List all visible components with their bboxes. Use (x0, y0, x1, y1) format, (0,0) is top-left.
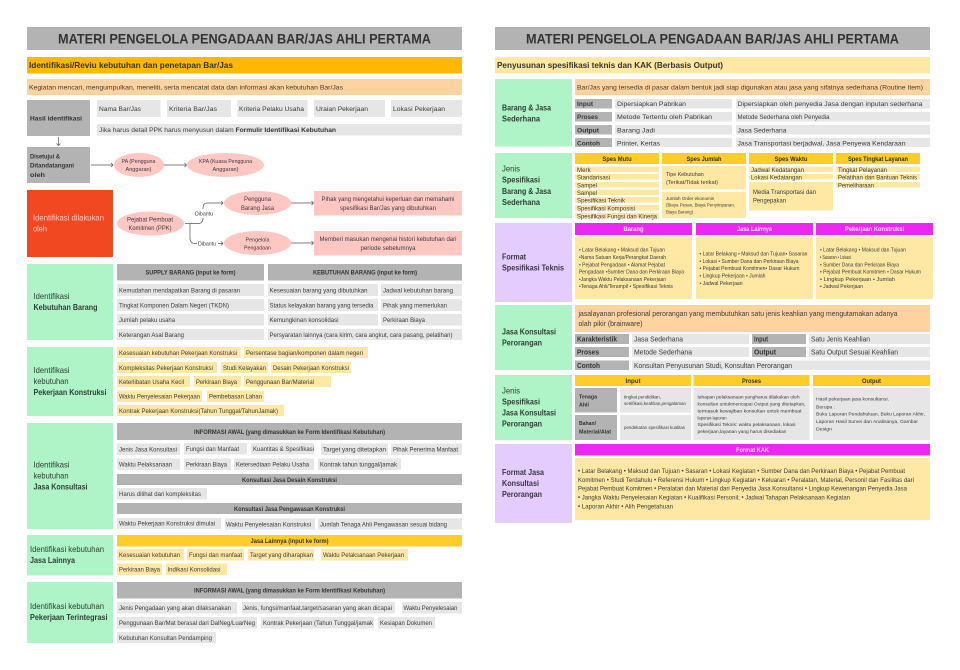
column: jasa lainnya: • Jadwal Pekerjaan (700, 281, 743, 287)
column: spes mutu: Sampel (577, 190, 597, 197)
column: input: Bahan/ (579, 421, 597, 427)
header: informasi awal: INFORMASI AWAL (yang dimasukkan ke Form Identifikasi Kebutuhan) (194, 429, 385, 436)
column: spes jumlah: Tipe Kebutuhan (666, 172, 704, 178)
description: jasalayanan profesional perorangan yang membutuhkan satu jenis keahlian yang mengutamakan adanya (578, 310, 898, 318)
description (575, 79, 930, 95)
panel: barang dan jasa sederhana (495, 79, 930, 148)
panel: pekerjaan konstruksi: Identifikasi (34, 366, 70, 375)
panel: format jasa konsultasi perorangan (495, 444, 930, 523)
panel: jenis spesifikasi jasa konsultasi: Jenis (502, 387, 520, 396)
chips: Jenis, fungsi/manfaat,target/sasaran yang akan dicapai (243, 605, 392, 612)
ellipse: KPA: Anggaran) (212, 167, 239, 173)
chips: Jenis Pengadaan yang akan dilaksanakan (119, 605, 231, 612)
column: input: Tenaga (579, 394, 597, 400)
column: output: Output (862, 378, 882, 385)
chip: pelaku: Kriteria Pelaku Usaha (239, 106, 304, 113)
column: spes mutu (575, 153, 659, 220)
chip: pelaku (238, 100, 308, 117)
title right: MATERI PENGELOLA PENGADAAN BAR/JAS AHLI PERTAMA (526, 32, 899, 48)
panel: jenis spesifikasi barang jasa (495, 153, 920, 220)
column: spes tingkat layanan (836, 153, 920, 189)
panel: jasa konsultasi: kebutuhan (34, 472, 68, 480)
column: spes tingkat layanan: Pemeliharaan (838, 182, 874, 189)
panel: disetujui: oleh (30, 172, 45, 179)
chips: Waktu Penyelesaian Konstruksi (226, 522, 311, 528)
panel: disetujui: Ditandatangani (30, 162, 74, 170)
ellipse: PA: PA (Pengguna (122, 159, 156, 165)
chips: Pihak yang memerlukan (383, 302, 447, 309)
panel: jasa konsultasi: Jasa Konsultasi (34, 483, 88, 492)
ellipse: PPK (117, 212, 184, 236)
arrow: down (56, 137, 60, 146)
chips: Jadwal kebutuhan barang (383, 287, 453, 294)
chip: kriteria: Kriteria Bar/Jas (169, 106, 218, 113)
chips: Studi Kelayakan (223, 365, 266, 372)
table: Satu Output Sesuai Keahlian (811, 348, 898, 356)
ellipse: PPK: Pejabat Pembuat (127, 216, 173, 223)
column: output: Hasil pekerjaan jasa konsultansi. (816, 397, 889, 402)
chips: Waktu Pelaksanaan (119, 462, 172, 468)
chips: Jenis Jasa Konsultasi (119, 447, 177, 454)
chips: Fungsi dan manfaat (189, 552, 242, 559)
table: Contoh (577, 140, 600, 148)
table (575, 334, 930, 370)
section heading: identifikasi (27, 57, 462, 74)
header: informasi awal (117, 582, 462, 598)
column: proses: termasuk kewajiban konsultan untuk membuat (698, 408, 802, 413)
panel: format spesifikasi teknis: Spesifikasi Teknis (502, 264, 564, 273)
panel: format jasa konsultasi perorangan: Konsultasi (502, 479, 539, 488)
column: spes waktu: Pengepakan (753, 198, 786, 205)
panel: pekerjaan konstruksi (27, 347, 368, 416)
table: Input (754, 336, 769, 344)
panel: identifikasi dilakukan oleh: oleh (33, 224, 47, 234)
chips: Perkiraan Biaya (383, 317, 425, 324)
chips: Status kelayakan barang yang tersedia (270, 302, 374, 309)
chip: lokasi (391, 100, 462, 117)
chips: Perkiraan Biaya (196, 379, 237, 386)
chips: Keterlibatan Usaha Kecil (119, 379, 184, 386)
column: input: Material/Alat (579, 430, 611, 436)
ellipse: PPK: Komitmen (PPK) (128, 225, 172, 232)
header: informasi awal: INFORMASI AWAL (yang dimasukkan ke Form Identifikasi Kebutuhan) (194, 588, 385, 594)
column: proses: tahapan pelaksanaan yangharus dilakukan oleh (698, 394, 800, 400)
column: jasa lainnya: Jasa Lainnya (737, 226, 772, 233)
panel: kebutuhan barang: Kebutuhan Barang (34, 303, 98, 312)
column: jasa lainnya: • Lingkup Pekerjaan • Jumlah (700, 274, 766, 280)
table: Barang Jadi (617, 127, 656, 134)
chips (117, 443, 462, 470)
table: Proses (577, 114, 598, 121)
column: spes jumlah: (Biaya Pesan, Biaya Penyimpanan, (666, 203, 735, 208)
description text: Kegiatan mencari, mengumpulkan, meneliti, serta mencatat data dan informasi akan kebutuhan Bar/Jas (29, 84, 344, 92)
chips: Fungsi dan Manfaat (186, 446, 239, 453)
left column (27, 27, 462, 643)
column: spes jumlah: Spes Jumlah (686, 156, 722, 163)
section heading: identifikasi: Identifikasi/Reviu kebutuhan dan penetapan Bar/Jas (29, 61, 233, 70)
chips (117, 518, 462, 530)
connector: PPK branches: Dibantu (195, 211, 213, 217)
title right (495, 27, 930, 50)
column: spes tingkat layanan: Tingkat Pelayanan (838, 167, 887, 174)
panel: jenis spesifikasi barang jasa: Barang & Jasa (502, 187, 551, 196)
chips: Target yang ditetapkan (323, 447, 386, 454)
column: spes waktu: Lokasi Kedatangan (751, 174, 802, 181)
column: input: Input (626, 378, 641, 385)
callout: pengguna: Pihak yang mengetahui keperluan dan memahami (322, 196, 455, 203)
column: pekerjaan konstruksi: • Jadwal Pekerjaan (820, 284, 863, 290)
panel: identifikasi dilakukan oleh: Identifikasi dilakukan (33, 214, 104, 222)
column: input: pendekatan spesifikasi kualitas (624, 425, 685, 430)
panel: jenis spesifikasi barang jasa: Sederhana (502, 198, 541, 207)
column: pekerjaan konstruksi: • Latar Belakang • Maksud dan Tujuan (820, 248, 906, 254)
KAK content (575, 458, 930, 520)
panel: jenis spesifikasi jasa konsultasi (495, 375, 930, 440)
column: spes waktu: Media Transportasi dan (753, 189, 816, 196)
section heading: penyusunan: Penyusunan spesifikasi teknis dan KAK (Berbasis Output) (497, 61, 723, 70)
panel: format jasa konsultasi perorangan: Format Jasa (502, 468, 544, 477)
column: spes waktu: Spes Waktu (774, 156, 808, 163)
chip: uraian: Uraian Pekerjaan (316, 106, 368, 113)
chips: Kesesuaian barang yang dibutuhkan (270, 287, 368, 294)
table: Metode Sederhana oleh Penyedia (738, 114, 830, 121)
column: pekerjaan konstruksi (816, 223, 933, 299)
header: format KAK: Format KAK (736, 447, 769, 454)
table: Karakteristik (577, 336, 617, 344)
table: Proses (577, 348, 599, 356)
ellipse: pengguna: Pengguna (244, 196, 271, 203)
chips (117, 347, 368, 416)
column: pekerjaan konstruksi: • Sumber Dana dan Perkiraan Biaya (820, 262, 899, 268)
column: output: Buku Laporan Pendahuluan, Buku Laporan Akhir, (816, 412, 925, 416)
chips: Persentase bagian/komponen dalam negeri (246, 350, 363, 357)
table: Jasa Sederhana (634, 336, 683, 344)
chips: Kuantitas & Spesifikasi (253, 446, 314, 453)
column: spes waktu (749, 153, 833, 210)
ellipse: pengguna (224, 191, 291, 215)
column: barang: Barang (624, 226, 644, 233)
column: input: tingkat pendidikan, (624, 394, 661, 399)
column: spes tingkat layanan: Spes Tingkat Layanan (848, 156, 908, 163)
column: barang: • Pejabat Pengadaan • Alamat Pejabat (579, 262, 665, 268)
column: spes mutu: Spesifikasi Fungsi dan Kinerja (577, 213, 657, 220)
title left: MATERI PENGELOLA PENGADAAN BAR/JAS AHLI PERTAMA (58, 32, 431, 48)
column: pekerjaan konstruksi: Pekerjaan Konstruksi (845, 226, 904, 233)
connector: PPK branches (185, 201, 223, 247)
header: jasa lainnya: Jasa Lainnya (input ke form) (250, 538, 328, 545)
panel: kebutuhan barang: Identifikasi (34, 292, 70, 301)
chips (117, 602, 462, 643)
column: jasa lainnya (696, 223, 813, 299)
chips: Desain Pekerjaan Konstruksi (273, 365, 349, 372)
chips: Kebutuhan Konsultan Pendamping (119, 635, 212, 642)
column: barang: • Latar Belakang • Maksud dan Tujuan (579, 248, 665, 254)
chips (117, 549, 408, 575)
column: pekerjaan konstruksi: • Sasaran • Lokasi (820, 255, 851, 261)
ellipse: KPA (187, 153, 264, 177)
column: spes mutu: Merk (577, 167, 591, 174)
chips: Kontrak tahun tunggal/jamak (320, 462, 398, 468)
chip: uraian (314, 100, 385, 117)
table: Metode Sederhana (634, 348, 692, 356)
header: kebutuhan: KEBUTUHAN BARANG (input ke form) (313, 270, 417, 276)
panel: jasa konsultasi (27, 423, 462, 530)
chips: Kesesuaian kebutuhan (119, 552, 180, 559)
table: Printer, Kertas (617, 140, 661, 148)
ellipse: PA (114, 153, 164, 177)
chips: Pembebasan Lahan (209, 394, 262, 400)
chips: Pihak Penerima Manfaat (393, 447, 458, 454)
panel: jasa konsultasi perorangan (495, 305, 930, 370)
chips: Waktu Pelaksanaan Pekerjaan (323, 552, 404, 559)
table (575, 99, 930, 148)
KAK content: • Jangka Waktu Penyelesaian Kegiatan • Kualifikasi Personil; • Jadwal Tahapan Pelaksanaan Kegiatan (578, 496, 850, 502)
column: spes mutu: Spes Mutu (602, 156, 632, 163)
KAK content: • Latar Belakang • Maksud dan Tujuan • Sasaran • Lokasi Kegiatan • Sumber Dana dan Perkiraan Biaya • Pejabat Pembuat (578, 469, 905, 475)
header: supply (117, 264, 264, 280)
table: Jasa Sederhana (738, 127, 787, 134)
column: barang (575, 223, 692, 299)
column: barang: •Nama Satuan Kerja/Perangkat Daerah (579, 255, 666, 261)
connector: PPK branches: Dibantu (198, 241, 216, 247)
column: input: sertifikasi,keahlian,pengalaman (624, 401, 687, 406)
column: spes mutu: Sampel (577, 182, 597, 189)
chips: Indikasi Konsolidasi (168, 567, 221, 574)
column: jasa lainnya: • Latar Belakang • Maksud dan Tujuan• Sasaran (700, 252, 808, 258)
chips: Jumlah Tenaga Ahli Pengawasan sesuai bidang (320, 522, 447, 528)
chips: Ketersediaan Pelaku Usaha (236, 462, 309, 468)
column: pekerjaan konstruksi: • Lingkup Pekerjaan • Jumlah (820, 277, 895, 283)
ellipse: KPA: KPA (Kuasa Pengguna (199, 159, 252, 165)
panel: pekerjaan konstruksi: kebutuhan (34, 377, 68, 386)
column: spes waktu: Jadwal Kedatangan (751, 167, 804, 174)
KAK content: Komitmen • Studi Terdahulu • Referensi Hukum • Lingkup Kegiatan • Keluaran • Peralatan, Material, Personil dan Fasilitas dari (578, 478, 914, 484)
ellipse: pengguna: Barang Jasa (241, 205, 274, 212)
KAK content: • Laporan Akhir • Alih Pengetahuan (578, 504, 673, 510)
chip: kriteria (167, 100, 231, 117)
panel: format spesifikasi teknis (495, 223, 933, 302)
description (575, 305, 930, 332)
table: Contoh (577, 362, 600, 370)
panel: disetujui (27, 147, 90, 183)
column: barang: •Tenaga Ahli/Terampil • Spesifikasi Teknis (579, 284, 673, 290)
panel: pekerjaan terintegrasi: Pekerjaan Terintegrasi (30, 613, 108, 622)
header: supply: SUPPLY BARANG (input ke form) (146, 270, 236, 276)
panel: jasa konsultasi perorangan: Jasa Konsultasi (502, 328, 556, 337)
chips: Perkiraan Biaya (186, 462, 227, 468)
chips: Waktu Penyelesaian (404, 605, 458, 612)
description text (27, 79, 462, 95)
column: input: Ahli (579, 402, 590, 408)
callout: pengguna (314, 191, 462, 216)
chip: nama: Nama Bar/Jas (99, 106, 142, 113)
KAK content: Pejabat Pembuat Komitmen • Peralatan dan Material dari Penyedia Jasa Konsultansi • Lingkup Kewenangan Penyedia Jasa (578, 487, 908, 493)
chip: kompleksitas: Harus dilihat dari kompleksitas (119, 491, 202, 498)
description: olah pikir (brainware) (578, 320, 642, 328)
column: jasa lainnya: • Pejabat Pembuat Komitmen• Dasar Hukum (700, 266, 800, 272)
column: proses: laporan-laporan (698, 415, 727, 420)
chips: Kemudahan mendapatkan Barang di pasaran (119, 287, 240, 294)
chips: Kontrak Pekerjaan (Tahun Tunggal/jamak (263, 620, 374, 627)
table: Input (577, 101, 594, 108)
column: jasa lainnya: • Lokasi • Sumber Dana dan Perkiraan Biaya (700, 259, 798, 265)
panel: pekerjaan konstruksi: Pekerjaan Konstruksi (34, 388, 106, 397)
panel: jasa lainnya: Jasa Lainnya (30, 556, 75, 565)
section heading: penyusunan (495, 57, 930, 74)
panel: format jasa konsultasi perorangan: Perorangan (502, 490, 542, 499)
chips: Persyaratan lainnya (cara kirim, cara angkut, cara pasang, pelatihan) (270, 332, 452, 339)
chips: Tingkat Komponen Dalam Negeri (TKDN) (119, 302, 229, 309)
column: barang: •Jangka Waktu Pelaksanaan Pekerjaan (579, 277, 666, 283)
chips: Waktu Pekerjaan Konstruksi dimulai (119, 521, 215, 528)
header: informasi awal (117, 423, 462, 440)
panel: kebutuhan barang (27, 264, 462, 340)
panel: hasil identifikasi: Hasil identifikasi (30, 116, 82, 122)
callout: pengelola: periode sebelumnya (360, 245, 416, 252)
right column (495, 27, 933, 523)
panel: jenis spesifikasi jasa konsultasi: Jasa Konsultasi (502, 409, 556, 418)
panel: identifikasi dilakukan oleh (27, 190, 113, 257)
header: format KAK (575, 444, 930, 456)
panel: jenis spesifikasi jasa konsultasi: Spesifikasi (502, 398, 540, 407)
panel: jasa lainnya: Identifikasi kebutuhan (30, 545, 104, 554)
column: output: Berupa : (816, 404, 835, 410)
panel: jenis spesifikasi jasa konsultasi: Perorangan (502, 420, 542, 429)
chip: kompleksitas (117, 488, 207, 500)
chip: nama (97, 100, 160, 117)
column: spes tingkat layanan: Pelatihan dan Bantuan Teknis (838, 174, 918, 181)
note: formulir (97, 124, 462, 136)
panel: jenis spesifikasi barang jasa: Jenis (502, 165, 520, 174)
table: Satu Jenis Keahlian (811, 336, 870, 344)
chips: Keterangan Asal Barang (119, 332, 184, 339)
column: output (813, 375, 930, 440)
panel: pekerjaan terintegrasi: Identifikasi kebutuhan (30, 602, 104, 611)
table: Dipersiapkan Pabrikan (617, 101, 686, 108)
chips: Penggunaan Bar/Material (246, 379, 314, 386)
arrow: to PA (91, 163, 113, 167)
chips: Penggunaan Bar/Mat berasal dari DalNeg/LuarNeg (119, 620, 255, 627)
panel: format spesifikasi teknis: Format (502, 253, 526, 262)
column: proses: konsultan untukmencapai Output yang ditetapkan, (698, 401, 806, 406)
arrow: to KPA (164, 163, 186, 167)
column: proses: Proses (742, 378, 761, 385)
table: Output (577, 127, 600, 134)
ellipse: pengelola: Pengadaan (244, 245, 271, 251)
callout: pengguna: spesifikasi Bar/Jas yang dibutuhkan (340, 205, 436, 212)
column: spes jumlah: Jumlah Order ekonomis (666, 196, 715, 201)
chips: Waktu Penyelesaian Pekerjaan (119, 394, 200, 400)
header: pengawasan (117, 503, 462, 514)
ellipse: PA: Anggaran) (126, 167, 152, 173)
column: pekerjaan konstruksi: • Pejabat Pembuat Komitmen • Dasar Hukum (820, 270, 921, 276)
column: barang: Pengadaan •Sumber Dana dan Perkiraan Biaya (579, 270, 684, 276)
callout: pengelola (314, 231, 462, 256)
arrows: to descriptions (291, 201, 314, 245)
column: spes mutu: Standarisasi (577, 174, 610, 181)
panel: jasa konsultasi: Identifikasi (34, 460, 70, 470)
column: proses (694, 375, 810, 440)
column: spes mutu: Spesifikasi Komposisi (577, 205, 635, 212)
chips: Kesesuaian kebutuhan Pekerjaan Konstruksi (119, 350, 237, 357)
column: output: Laporan Hasil Survei dan Analisanya, Gambar (816, 419, 918, 424)
ellipse: pengelola: Pengelola (246, 237, 270, 243)
column: spes jumlah: (Terikat/Tidak terikat) (666, 180, 718, 186)
panel: disetujui: Disetujui & (30, 153, 60, 160)
panel: barang dan jasa sederhana: Sederhana (502, 115, 541, 124)
panel: jasa konsultasi perorangan: Perorangan (502, 339, 542, 348)
column: spes jumlah: Biaya Barang) (666, 210, 693, 214)
chips: Jumlah pelaku usaha (119, 317, 175, 324)
column: spes mutu: Spesifikasi Teknik (577, 197, 626, 204)
chips: Perkiraan Biaya (119, 567, 160, 574)
panel: jenis spesifikasi barang jasa: Spesifikasi (502, 176, 540, 185)
table: Dipersiapkan oleh penyedia Jasa dengan inputan sederhana (738, 101, 923, 108)
column: output: Design (816, 426, 832, 432)
callout: pengelola: Memberi masukan mengenai histori kebutuhan dari (320, 236, 457, 243)
header: desain (117, 474, 462, 485)
column: input (575, 375, 691, 440)
table: Jasa Transportasi berjadwal, Jasa Penyewa Kendaraan (738, 140, 906, 148)
column: proses: pekerjaan,layanan yang harus disediakan (698, 429, 787, 434)
ellipse: pengelola (224, 231, 291, 255)
panel: hasil identifikasi (27, 100, 462, 136)
chips: Kesiapan Dokumen (380, 620, 432, 627)
chips: Kompleksitas Pekerjaan Konstruksi (119, 365, 213, 372)
table: Metode Tertentu oleh Pabrikan (617, 114, 712, 121)
header: jasa lainnya (117, 535, 462, 546)
description: Bar/Jas yang tersedia di pasar dalam bentuk jadi siap digunakan atau jasa yang sifatnya sederhana (Routine Item) (577, 84, 923, 92)
column: proses: Spesifikasi Teknis: waktu pelaksanaan, lokasi (698, 422, 796, 427)
chips: Kontrak Pekerjaan Konstruksi(Tahun Tunggal/TahunJamak) (119, 408, 278, 415)
note: formulir: Jika harus detail PPK harus menyusun dalam Formulir Identifikasi Kebutuhan (99, 127, 336, 134)
title left (27, 27, 462, 50)
table: Konsultan Penyusunan Studi, Konsultan Perorangan (634, 362, 792, 370)
chips: Target yang diharapkan (250, 552, 313, 559)
chip: lokasi: Lokasi Pekerjaan (393, 106, 445, 113)
chips: Kemungkinan konsolidasi (270, 317, 339, 324)
column: spes jumlah (662, 153, 746, 218)
panel: pekerjaan terintegrasi (27, 582, 462, 643)
chips (117, 284, 462, 340)
header: pengawasan: Konsultasi Jasa Pengawasan Konstruksi (234, 506, 345, 513)
table: Output (754, 348, 777, 356)
header: kebutuhan (268, 264, 462, 280)
panel: barang dan jasa sederhana: Barang & Jasa (502, 104, 551, 113)
header: desain: Konsultasi Jasa Desain Konstruksi (242, 477, 337, 484)
panel: jasa lainnya (27, 535, 462, 576)
